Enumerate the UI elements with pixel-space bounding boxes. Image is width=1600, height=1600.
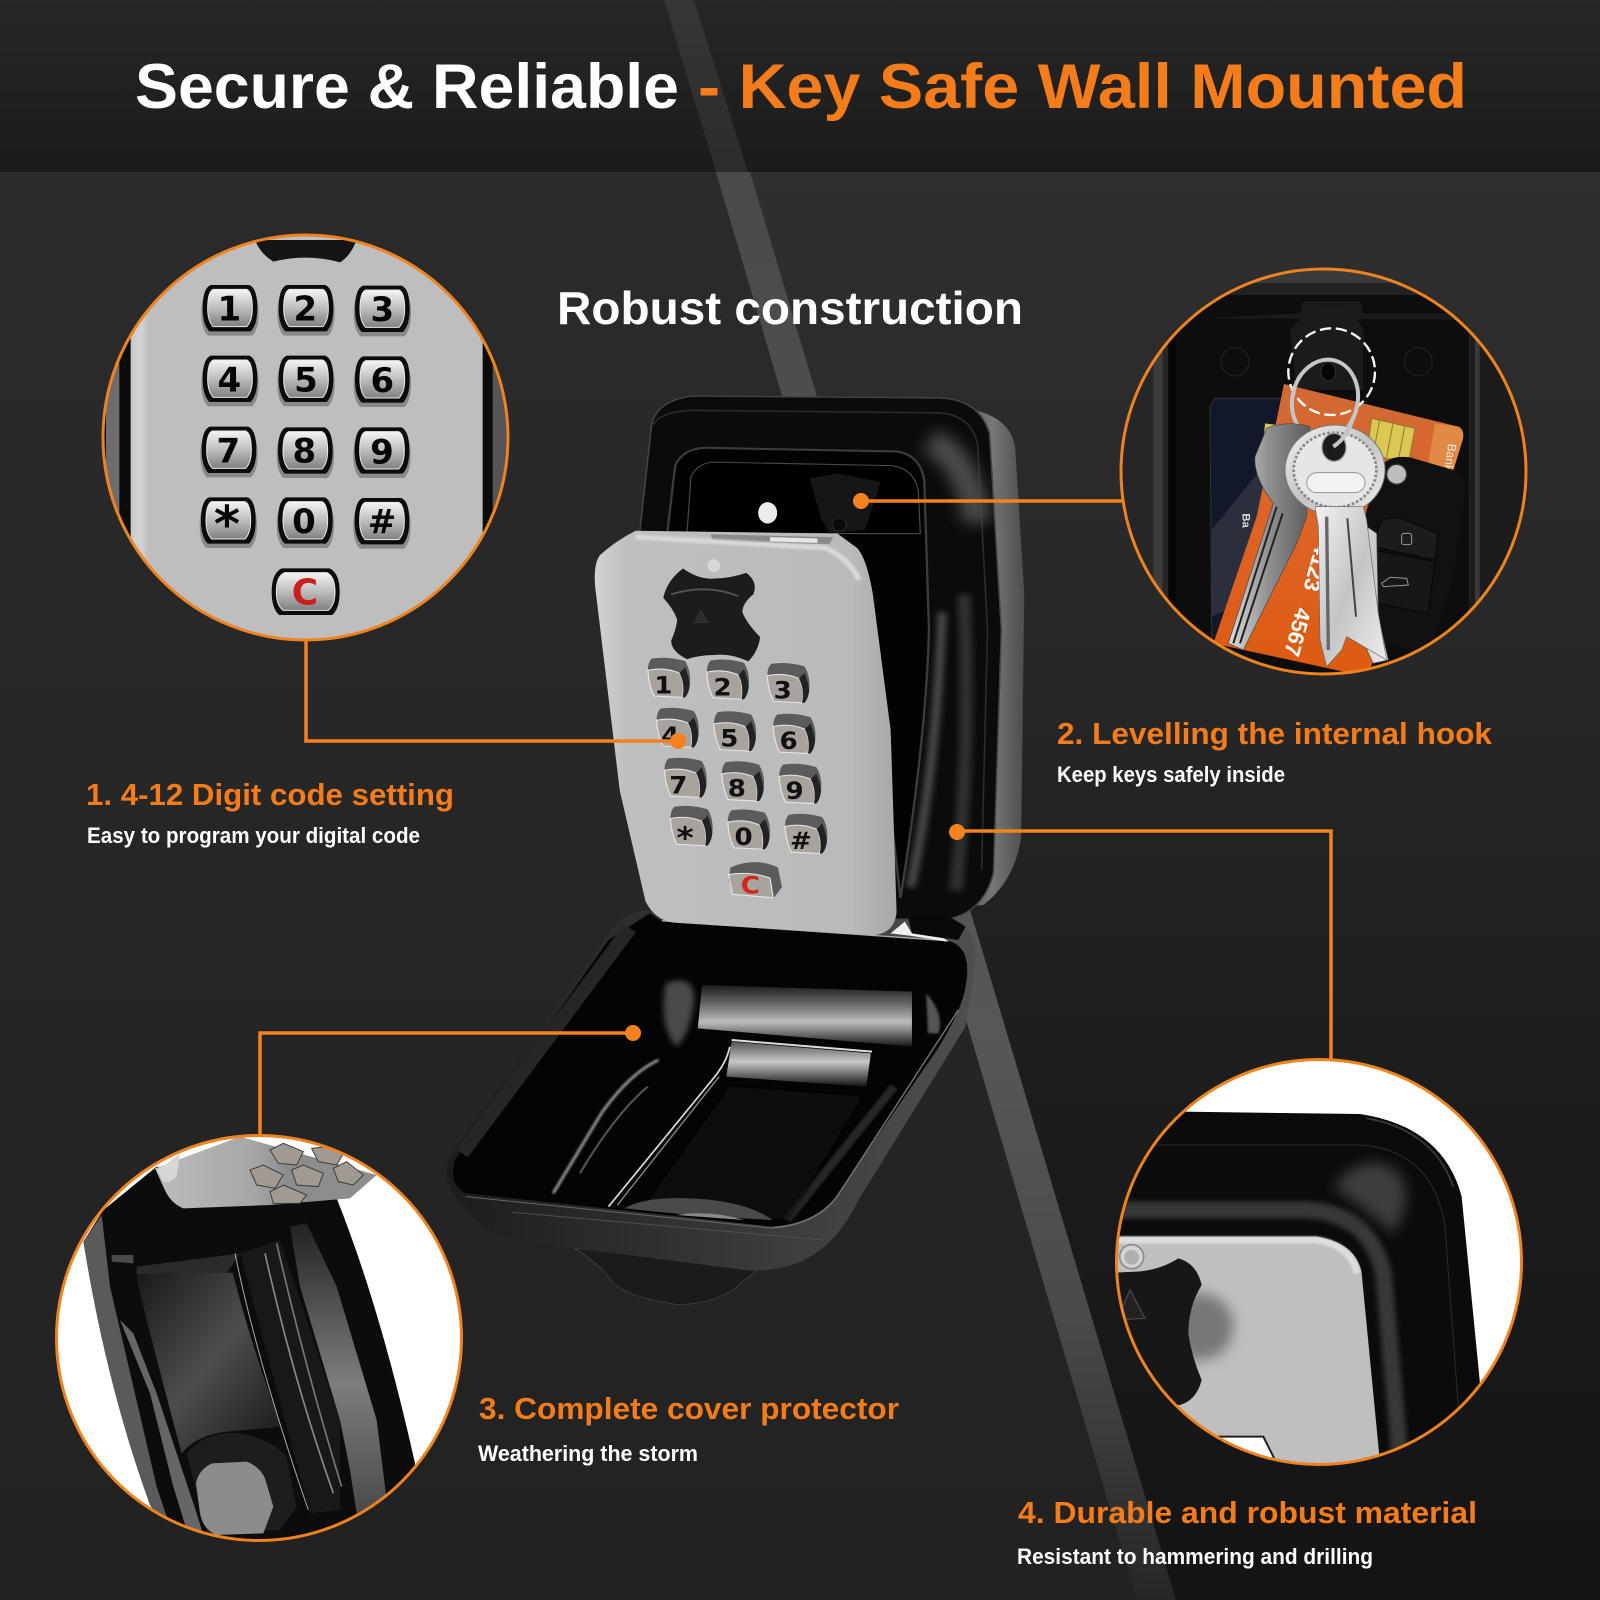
mounting hole — [758, 502, 777, 524]
keypad: # — [790, 827, 812, 855]
circle 1: keypad detail: C — [292, 573, 318, 614]
card numbers: 4123 — [1299, 540, 1335, 594]
upper housing — [595, 396, 1024, 935]
keypad: 4 — [661, 722, 679, 750]
callout 2 connector — [853, 493, 1122, 509]
ridge zone — [240, 1240, 340, 1513]
keypad: * — [676, 822, 694, 856]
circle 1: keypad detail: 4 — [218, 360, 241, 400]
callout 1 connector — [306, 640, 686, 749]
orange card — [1213, 384, 1463, 677]
keypad: C — [741, 872, 760, 899]
keypad: 5 — [720, 725, 738, 752]
circle 4: durable material detail — [1115, 1058, 1523, 1466]
frame — [1120, 1112, 1480, 1454]
keypad: 0 — [734, 823, 753, 851]
mini keys — [250, 1143, 363, 1203]
dark card — [1210, 398, 1281, 638]
keypad: 3 — [774, 677, 792, 704]
heading: Robust construction: Robust construction — [557, 282, 1023, 334]
edge highlight — [773, 1010, 958, 1228]
foot — [575, 1248, 762, 1305]
keypad — [648, 658, 827, 899]
product: open key safe — [446, 396, 1024, 1305]
shell — [83, 1167, 415, 1560]
bump — [625, 1198, 773, 1220]
text block: feature 1: Easy to program your digital code — [87, 823, 420, 848]
hook — [810, 474, 881, 534]
text block: feature 4 — [1017, 1495, 1477, 1569]
keypad: 8 — [728, 775, 746, 802]
knob — [1118, 1258, 1202, 1406]
side strips — [104, 338, 131, 538]
circle 2: internal hook with keys: Ba — [1240, 513, 1252, 529]
interior highlights — [787, 1087, 894, 1220]
outer shell — [446, 910, 976, 1270]
keypad: 1 — [654, 672, 672, 699]
keypad: 7 — [669, 772, 687, 799]
callout 4 connector — [949, 824, 1331, 1060]
callout 3 connector — [260, 1025, 641, 1136]
text block: feature 2: 2. Levelling the internal hook — [1057, 716, 1493, 751]
circle 1: keypad detail: 6 — [371, 361, 394, 401]
key fob — [1366, 456, 1454, 638]
keypad: 2 — [714, 674, 732, 701]
keys — [201, 285, 259, 336]
text block: feature 3 — [478, 1391, 899, 1466]
text block: feature 1 — [86, 777, 454, 848]
card numbers — [1286, 544, 1319, 657]
gray strips — [83, 1215, 166, 1516]
chip — [1367, 418, 1415, 463]
lower lid — [446, 910, 976, 1305]
front key — [1285, 417, 1387, 667]
bottom button — [187, 1433, 297, 1533]
text block: feature 2: Keep keys safely inside — [1057, 762, 1285, 787]
circle 1: keypad detail: 7 — [217, 432, 240, 472]
key ring — [1290, 358, 1360, 426]
circle 2: internal hook with keys — [1120, 268, 1528, 676]
circle 3: cover interior detail — [55, 1134, 463, 1542]
circle 1: keypad detail: 3 — [371, 290, 394, 330]
back key left — [1228, 424, 1310, 650]
circle 1: keypad detail — [100, 230, 520, 650]
top notch — [255, 240, 357, 262]
circle 1: keypad detail: 5 — [294, 360, 318, 400]
text block: feature 1: 1. 4-12 Digit code setting — [86, 777, 454, 812]
text block: feature 3: Weathering the storm — [478, 1441, 698, 1466]
circle 1: keypad detail: 1 — [218, 290, 241, 330]
text block: feature 3: 3. Complete cover protector — [479, 1391, 899, 1426]
knob — [663, 569, 760, 661]
circle 1: keypad detail: 9 — [370, 432, 394, 472]
text block: feature 4: Resistant to hammering and drilling — [1017, 1544, 1373, 1569]
hook dashed circle — [1288, 328, 1375, 415]
panel — [1118, 1236, 1380, 1463]
inner cavity — [453, 913, 967, 1227]
circle 1: keypad detail: 8 — [293, 432, 316, 472]
hook mount — [1200, 302, 1470, 320]
left bay — [137, 1273, 282, 1453]
back key right — [1366, 527, 1389, 664]
hinge — [891, 913, 966, 942]
circle 1: keypad detail: # — [368, 503, 396, 543]
circle 1: keypad detail: 0 — [292, 502, 316, 542]
circle 1: keypad detail: 2 — [294, 290, 317, 330]
cylinder — [698, 985, 912, 1047]
ridges — [608, 1047, 730, 1207]
panel — [595, 531, 897, 935]
panel bottom — [155, 1137, 377, 1208]
slot — [1218, 1436, 1276, 1458]
text block: feature 4: 4. Durable and robust material — [1018, 1495, 1477, 1530]
circle 1: keypad detail: * — [214, 496, 240, 554]
circle 2: internal hook with keys: Bank — [1441, 443, 1459, 473]
title — [135, 52, 1467, 122]
text block: feature 2 — [1057, 716, 1493, 787]
keypad: 6 — [780, 727, 798, 755]
keypad: 9 — [785, 777, 804, 805]
right bay — [290, 1223, 387, 1513]
title: Secure & Reliable — [135, 52, 679, 122]
card numbers: 4567 — [1279, 605, 1316, 659]
bumps — [1221, 348, 1249, 376]
title: - Key Safe Wall Mounted — [698, 52, 1467, 122]
